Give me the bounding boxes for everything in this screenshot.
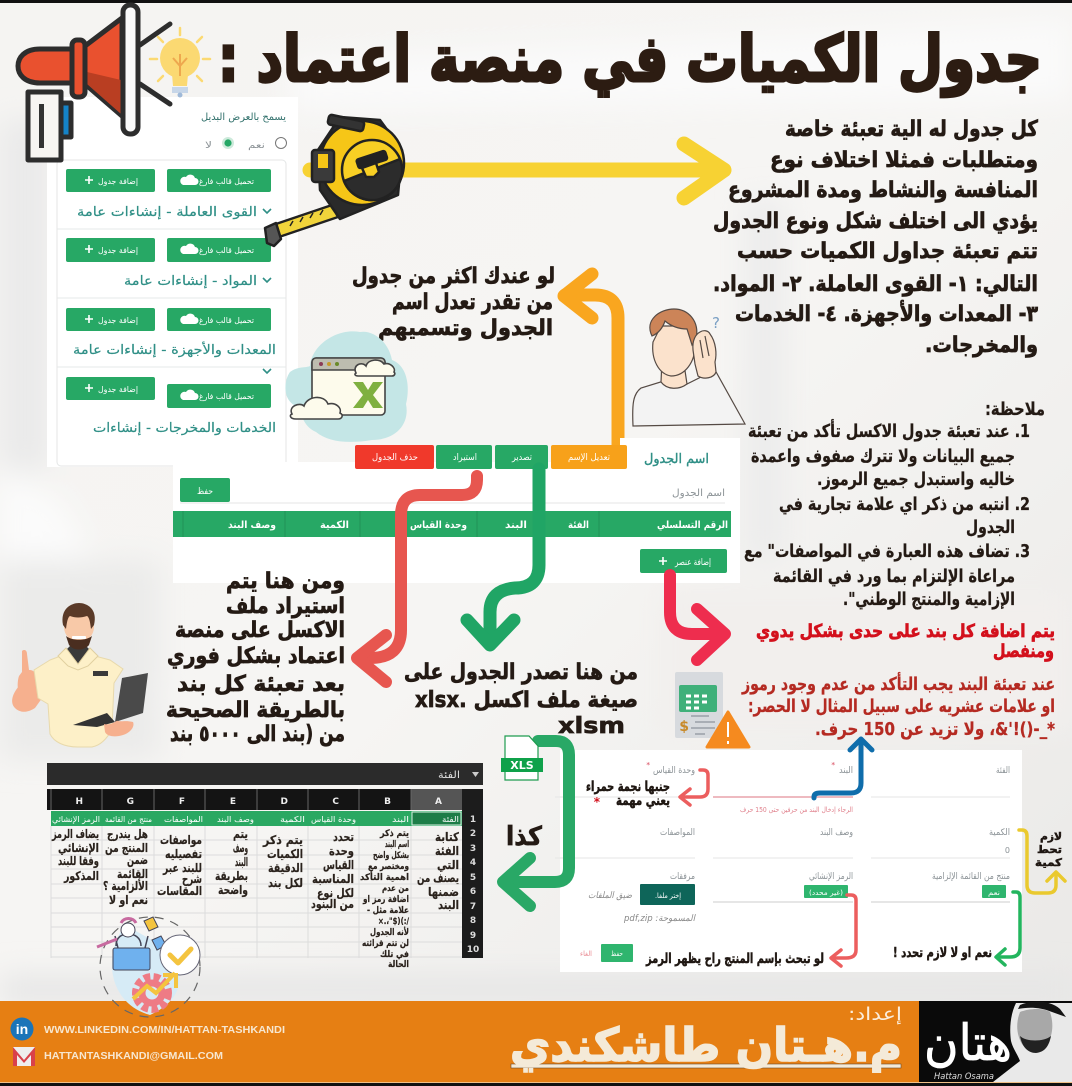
- column D text: لكل بند: [268, 876, 303, 890]
- form row 3: منتج من القائمة الإلزامية: [932, 872, 1010, 882]
- icon: gears and productivity circle: [97, 917, 200, 1017]
- icon: XLS file: XLS: [510, 759, 534, 772]
- icon: linkedin: in: [16, 1021, 28, 1037]
- form save and cancel: حفظ: [611, 950, 623, 958]
- text: export explanation: من هنا تصدر الجدول على: [404, 660, 638, 685]
- icon: person listening: [633, 309, 745, 426]
- column C text: لكل نوع: [317, 886, 354, 901]
- green header row: [173, 511, 731, 537]
- arrow: pink from add element: [670, 575, 725, 660]
- column B text: اهمية التأكد: [360, 871, 409, 883]
- form row 1: وحدة القياس: [653, 766, 695, 776]
- form row 1: *: [646, 761, 650, 769]
- text: rename tables: [352, 264, 555, 341]
- icon: light bulb: [150, 28, 210, 98]
- row numbers: 8: [470, 916, 476, 926]
- green header row: وصف البند: [228, 520, 276, 531]
- icon: calculator sheet and warning: [675, 672, 749, 747]
- row: services: [66, 377, 276, 436]
- form row 2: وصف البند: [820, 828, 853, 838]
- form row 1: [555, 761, 1010, 814]
- row numbers: 6: [470, 887, 476, 897]
- row: services: الخدمات والمخرجات - إنشاءات: [93, 421, 276, 436]
- column D text: الكميات: [267, 847, 303, 861]
- add element button: [640, 549, 727, 573]
- row numbers: 10: [467, 945, 479, 955]
- arrow: red from symbol field: [831, 895, 856, 966]
- text: import explanation: استيراد ملف: [226, 594, 345, 619]
- column B text: اسم البند: [385, 840, 409, 850]
- text: export explanation: [404, 660, 638, 739]
- note: must add quantity: [1035, 831, 1063, 869]
- icon: person listening: ?: [712, 314, 720, 332]
- row: labour: [66, 169, 271, 220]
- row numbers: [467, 815, 479, 955]
- row numbers: 4: [470, 858, 476, 868]
- action buttons: استيراد: [453, 453, 477, 463]
- linkedin url: WWW.LINKEDIN.COM/IN/HATTAN-TASHKANDI: [44, 1024, 285, 1036]
- form row 2: المواصفات: [660, 828, 695, 838]
- item form panel: [555, 750, 1022, 972]
- form row 3: مرفقات: [670, 872, 695, 882]
- green header row: وحدة القياس: [410, 520, 467, 531]
- note: must add quantity: لازم: [1040, 831, 1062, 843]
- row numbers: 3: [470, 844, 476, 854]
- sheet header labels: المواصفات: [164, 815, 203, 824]
- column C text: وحدة: [329, 844, 354, 859]
- column E text: البند: [235, 855, 248, 869]
- author logo and photo: [919, 1001, 1072, 1082]
- row numbers: 2: [470, 829, 476, 839]
- column E text: واضحة: [218, 883, 248, 898]
- body text: table filling intro: تتم تعبئة جداول الكميات حسب: [737, 239, 1038, 264]
- text: import explanation: من (بند الى ٥٠٠٠ بند: [170, 722, 345, 747]
- arrow: yellow from tape to text: [310, 144, 724, 198]
- form row 3: [588, 872, 1010, 924]
- column B text: يتم ذكر: [379, 829, 409, 839]
- column C text: المناسبة: [312, 872, 354, 886]
- column C text: [311, 830, 354, 912]
- text: rename tables: الجدول وتسميهم: [378, 316, 553, 341]
- note: red star: جنبها نجمة حمراء: [586, 779, 670, 795]
- row: equipment: [66, 308, 276, 373]
- icon: calculator sheet and warning: $: [679, 719, 689, 735]
- form row 1: الرجاء إدخال البند من حرفين حتى 150 حرف: [740, 806, 853, 814]
- column E text: بطريقة: [215, 869, 248, 883]
- notes: خاليه واستبدل جميع الرموز.: [817, 469, 1015, 490]
- row: labour: القوى العاملة - إنشاءات عامة: [77, 205, 257, 220]
- grid lines: [51, 826, 462, 958]
- text: import explanation: ومن هنا يتم: [226, 569, 345, 594]
- form row 3: إختر ملفا.: [655, 892, 681, 900]
- column F text: [157, 833, 202, 898]
- text: export explanation: xlsm: [558, 714, 625, 739]
- sheet header labels: البند: [392, 815, 409, 824]
- action buttons: تعديل الإسم: [568, 453, 610, 463]
- radio options: لا: [205, 141, 212, 151]
- icon: excel window with clouds: [285, 331, 408, 442]
- red notice: manual entry: [756, 621, 1055, 662]
- form row 2: 0: [1005, 846, 1010, 855]
- column B text: [360, 829, 410, 970]
- notes: [744, 399, 1045, 610]
- save button: [180, 478, 230, 502]
- arrow: orange rename: [564, 274, 618, 445]
- sheet header labels: الرمز الإنشائي: [52, 815, 100, 825]
- form save and cancel: الغاء: [580, 950, 592, 958]
- column H text: المذكور: [63, 869, 99, 884]
- column C text: من البنود: [311, 897, 354, 912]
- sheet header labels: [52, 815, 459, 825]
- icon: engineer with laptop: [12, 603, 148, 747]
- table name field: اسم الجدول: [672, 488, 725, 499]
- icon: mail: [13, 1047, 35, 1066]
- author logo and photo: هتان: [924, 1014, 1012, 1072]
- row numbers: 1: [470, 815, 476, 825]
- excel sheet example: الفئة: [438, 770, 460, 781]
- column B text: لأنه الجدول: [370, 926, 409, 938]
- column B text: علامة مثل -: [367, 906, 409, 916]
- email: HATTANTASHKANDI@GMAIL.COM: [44, 1050, 223, 1062]
- form row 3: المسموحة: pdf,zip: [623, 914, 696, 924]
- icon: XLS file: [501, 736, 543, 780]
- column B text: ×.،"$)(:/: [378, 917, 410, 927]
- action buttons: تصدير: [511, 453, 532, 463]
- icon: megaphone: [18, 5, 170, 160]
- text: rename tables: من تقدر تعدل اسم: [392, 290, 553, 315]
- column C text: القياس: [323, 858, 354, 872]
- column E text: [215, 827, 248, 898]
- form row 3: (غير محدد): [809, 889, 843, 897]
- row: materials: [66, 238, 271, 289]
- column letters: H: [75, 797, 83, 807]
- radio options: [205, 137, 286, 151]
- green header row: الرقم التسلسلي: [657, 520, 728, 531]
- row numbers: 7: [470, 902, 476, 912]
- excel sheet example: وصف: [233, 841, 248, 856]
- column B text: لن تتم قرائته: [362, 939, 409, 949]
- column letters: A: [435, 797, 442, 807]
- form save and cancel: [580, 944, 633, 962]
- column letters: B: [384, 797, 391, 807]
- table name heading: اسم الجدول: [644, 452, 709, 467]
- column G text: المنتج من: [105, 841, 148, 855]
- text: import explanation: اعتماد بشكل فوري: [167, 644, 345, 669]
- author name: م.هـتان طاشكندي: [510, 1018, 902, 1072]
- column D text: [262, 833, 303, 890]
- row: equipment: إضافة جدول: [98, 316, 138, 326]
- row numbers: 5: [470, 873, 476, 883]
- body text: table filling intro: ٣- المعدات والأجهزة. ٤- الخدمات: [735, 299, 1038, 327]
- column E text: يتم: [233, 827, 248, 841]
- row: equipment: المعدات والأجهزة - إنشاءات عامة: [73, 341, 276, 358]
- column B text: في تلك: [380, 950, 409, 960]
- row: labour: إضافة جدول: [98, 177, 138, 187]
- note: red star: يعني مهمة: [616, 793, 670, 809]
- row: equipment: تحميل قالب فارغ: [199, 316, 254, 325]
- row: services: إضافة جدول: [98, 385, 138, 395]
- column C text: تحدد: [333, 830, 354, 844]
- column H text: يضاف الرمز: [51, 827, 99, 841]
- row: materials: المواد - إنشاءات عامة: [124, 274, 257, 289]
- column F text: مواصفات: [160, 833, 202, 848]
- arrow: red from import: [357, 476, 477, 682]
- note: red star: [586, 779, 670, 809]
- green header row: البند: [505, 520, 527, 531]
- row: labour: تحميل قالب فارغ: [199, 177, 254, 186]
- column B text: الحالة: [388, 960, 409, 970]
- row: materials: إضافة جدول: [98, 246, 138, 256]
- column H text: [51, 827, 99, 884]
- row numbers: 9: [470, 931, 476, 941]
- text: like this: كذا: [506, 822, 543, 852]
- column G text: القائمة: [117, 867, 148, 881]
- form row 3: ضيق الملفات: [588, 891, 632, 901]
- notes: الإزامية والمنتج الوطني".: [843, 589, 1015, 610]
- text: export explanation: صيغة ملف اكسل .xlsx: [415, 688, 638, 713]
- column A text: يصنف من: [417, 871, 459, 885]
- sheet header labels: الكمية: [280, 815, 305, 824]
- text: rename tables: لو عندك اكثر من جدول: [352, 264, 555, 289]
- action buttons: حذف الجدول: [372, 453, 418, 463]
- row: services: تحميل قالب فارغ: [199, 392, 254, 401]
- prepared by: إعداد:: [848, 1004, 902, 1025]
- column letters: D: [281, 797, 288, 807]
- action buttons: [355, 445, 627, 469]
- note: must add quantity: كمية: [1035, 857, 1063, 869]
- red notice: manual entry: ومنفصل: [993, 641, 1054, 662]
- column H text: الإنشائي: [58, 841, 99, 855]
- green header row: الكمية: [320, 520, 349, 531]
- column G text: نعم او لا: [109, 893, 148, 908]
- table editor panel: [173, 438, 740, 583]
- form row 3: نعم: [988, 889, 1000, 897]
- column F text: تفصيليه: [165, 847, 202, 861]
- notes: مراعاة الإلتزام بما ورد في القائمة: [773, 566, 1015, 587]
- column B text: بشكل واضح: [373, 851, 409, 861]
- column B text: اضافة رمز او: [362, 895, 409, 905]
- column D text: يتم ذكر: [262, 833, 303, 847]
- arrow: green from xls to sheet: [503, 741, 569, 906]
- body text: table filling intro: [713, 117, 1038, 358]
- excel sheet example: [47, 763, 483, 970]
- icon: tape measure: [265, 114, 404, 246]
- column D text: الدقيقة: [268, 861, 303, 875]
- green header row: الفئة: [568, 520, 589, 531]
- arrow: green from export: [467, 469, 539, 645]
- footer banner: [0, 1001, 1072, 1086]
- column F text: للبند عبر: [162, 861, 202, 875]
- body text: table filling intro: والمخرجات.: [925, 333, 1038, 358]
- column G text: ضمن: [127, 853, 148, 867]
- form row 1: الفئة: [996, 766, 1010, 776]
- text: import explanation: بالطريقة الصحيحة: [166, 698, 345, 723]
- note: search by product name: لو تبحث بإسم المنتج راح يظهر الرمز: [645, 951, 824, 967]
- arrow: blue to character limit: [814, 739, 872, 798]
- column B text: من عدم: [382, 884, 409, 894]
- allow alternative offer label: يسمح بالعرض البديل: [201, 112, 286, 123]
- column G text: هل يندرج: [107, 827, 148, 841]
- note: red star: *: [594, 795, 601, 809]
- body text: table filling intro: التالي: ١- القوى العاملة. ٢- المواد.: [713, 272, 1038, 297]
- sheet header labels: الفئة: [442, 815, 459, 824]
- column A text: [417, 830, 459, 912]
- form row 2: [555, 828, 1010, 858]
- column F text: المقاسات: [157, 884, 202, 898]
- sheet header labels: وحدة القياس: [311, 815, 356, 824]
- save button: حفظ: [197, 487, 213, 497]
- notes: ملاحظة:: [985, 399, 1045, 420]
- column letters: G: [127, 797, 134, 807]
- column A text: كتابة: [435, 830, 459, 844]
- icon: linkedin: [10, 1018, 34, 1040]
- column letters: C: [332, 797, 339, 807]
- column A text: ضمنها: [428, 885, 459, 899]
- left form panel: table type list: [47, 97, 298, 467]
- author logo and photo: Hattan Osama: [934, 1072, 994, 1082]
- arrow: green from required list: [996, 892, 1020, 965]
- column B text: ومختصر مع: [368, 862, 409, 872]
- column letters: E: [230, 797, 236, 807]
- add element button: إضافة عنصر: [674, 558, 711, 568]
- note: must add quantity: تحط: [1037, 844, 1062, 856]
- column H text: وفقا للبند: [58, 854, 99, 869]
- form row 1: *: [831, 761, 835, 769]
- column letters: [75, 797, 442, 807]
- column A text: الفئة: [435, 844, 459, 858]
- arrow: red from unit field: [680, 770, 708, 805]
- form row 2: الكمية: [989, 828, 1010, 838]
- radio options: نعم: [248, 141, 265, 151]
- column A text: البند: [438, 898, 459, 912]
- note: yes or no: نعم او لا لازم تحدد !: [893, 945, 992, 961]
- form row 1: البند: [839, 766, 853, 776]
- arrow: yellow from quantity: [1019, 830, 1065, 893]
- row: materials: تحميل قالب فارغ: [199, 246, 254, 255]
- body text: table filling intro: ومتطلبات فمثلا اختلاف نوع: [770, 148, 1038, 173]
- text: import explanation: بعد تعبئة كل بند: [177, 672, 345, 697]
- column F text: شرح: [182, 872, 202, 886]
- sheet header labels: منتج من القائمة: [105, 815, 152, 824]
- notes: الجدول: [966, 517, 1015, 538]
- text: import explanation: [166, 569, 345, 747]
- column G text: الألزامية ؟: [103, 878, 148, 893]
- form row 3: الرمز الإنشائي: [809, 872, 853, 882]
- column G text: [103, 827, 148, 908]
- sheet header labels: وصف البند: [217, 815, 254, 824]
- red notice: symbols not allowed: [741, 672, 1055, 740]
- text: import explanation: الاكسل على منصة: [175, 618, 345, 643]
- column letters: F: [179, 797, 185, 807]
- column A text: التي: [437, 858, 459, 872]
